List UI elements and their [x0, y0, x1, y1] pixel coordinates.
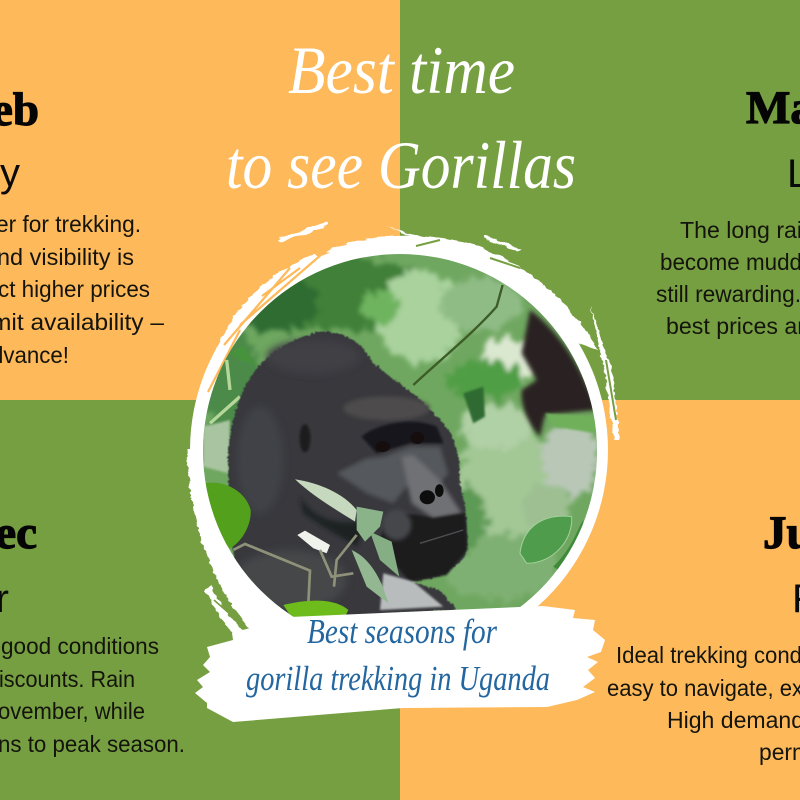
lower-left brush sweep	[187, 450, 300, 652]
panel: low season text, top right	[656, 82, 800, 339]
body text: ct higher prices	[0, 276, 150, 302]
panel: dry season text, top left	[0, 84, 164, 368]
title: to see Gorillas	[226, 127, 576, 203]
title	[226, 32, 576, 203]
nostrils	[420, 484, 444, 504]
top brush sweep	[325, 236, 598, 350]
large green leaf	[205, 483, 251, 548]
photo: mountain gorilla in foliage	[203, 254, 597, 617]
panel: shoulder season text, bottom left	[0, 507, 185, 757]
body text: iscounts. Rain	[0, 666, 135, 692]
ear	[300, 424, 310, 452]
brow	[362, 422, 443, 453]
face	[337, 447, 448, 503]
gorilla	[228, 332, 467, 620]
body text: ns to peak season.	[0, 731, 185, 757]
top-left dry brush	[210, 254, 322, 375]
body text: still rewarding.	[656, 281, 800, 307]
stems	[233, 535, 357, 603]
body text: The long rai	[680, 217, 800, 243]
subheading: season: y	[0, 151, 20, 195]
body text	[607, 642, 800, 765]
muzzle	[402, 455, 462, 518]
brush ring frame	[187, 222, 620, 659]
caption text	[246, 612, 550, 698]
panel: top-left background	[0, 0, 400, 400]
second gorilla, blurred	[521, 310, 597, 437]
eyes	[375, 432, 424, 452]
cheek and chin	[380, 513, 467, 582]
body text	[656, 217, 800, 339]
caption text: Best seasons for	[307, 612, 497, 651]
pale leaves	[295, 479, 399, 603]
caption text: gorilla trekking in Uganda	[246, 659, 550, 698]
panel: top-right background	[400, 0, 800, 400]
caption banner	[195, 606, 605, 722]
lime leaf	[283, 600, 348, 617]
dry-brush gaps	[208, 254, 322, 392]
panel: bottom-left background	[0, 400, 400, 800]
foliage background	[203, 254, 597, 617]
body text: nd visibility is	[0, 244, 134, 270]
body text	[0, 633, 185, 757]
gorilla body and head	[228, 332, 467, 620]
brush stroke	[195, 606, 605, 722]
body text: best prices ar	[666, 313, 800, 339]
title: Best time	[288, 32, 515, 108]
body text	[0, 211, 164, 368]
body text: High demand	[667, 707, 800, 733]
body text: ovember, while	[0, 698, 145, 724]
chest	[380, 573, 443, 610]
panel: peak season text, bottom right	[607, 507, 800, 765]
body text: er for trekking.	[0, 211, 141, 237]
foreground leaves	[205, 479, 399, 620]
body text: good conditions	[1, 633, 159, 659]
panel: bottom-right background	[400, 400, 800, 800]
